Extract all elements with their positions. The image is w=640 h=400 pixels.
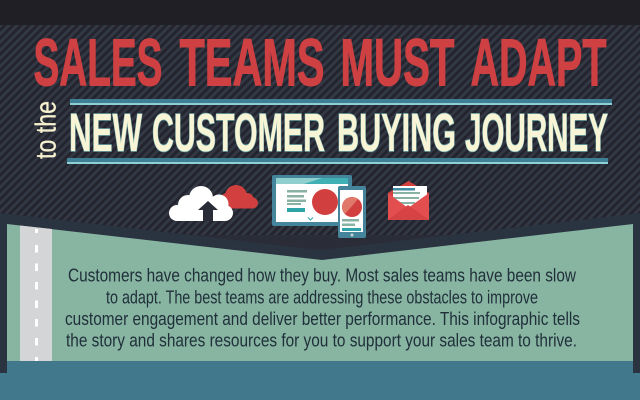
subtitle: CUSTOMER — [152, 103, 325, 163]
title: TEAMS — [180, 26, 324, 100]
icon: envelope — [388, 181, 429, 220]
title — [34, 26, 607, 100]
icon: desktop and phone — [272, 175, 366, 238]
monitor — [272, 175, 352, 226]
title: MUST — [340, 26, 455, 100]
road — [20, 226, 52, 361]
header background — [0, 0, 640, 235]
subtitle rule: top — [70, 99, 612, 105]
panel frame — [0, 213, 640, 373]
footer band — [0, 361, 640, 400]
icon: red cloud — [220, 185, 258, 208]
panel: introduction — [7, 224, 633, 361]
intro text — [65, 264, 580, 350]
title: SALES — [34, 26, 162, 100]
icon: white upload cloud — [169, 186, 233, 221]
subtitle — [69, 103, 608, 163]
vertical text: to the: to the — [30, 101, 62, 159]
subtitle: BUYING — [337, 103, 456, 163]
subtitle rule: bottom — [67, 158, 608, 164]
subtitle: NEW — [69, 103, 142, 163]
phone — [338, 186, 366, 238]
